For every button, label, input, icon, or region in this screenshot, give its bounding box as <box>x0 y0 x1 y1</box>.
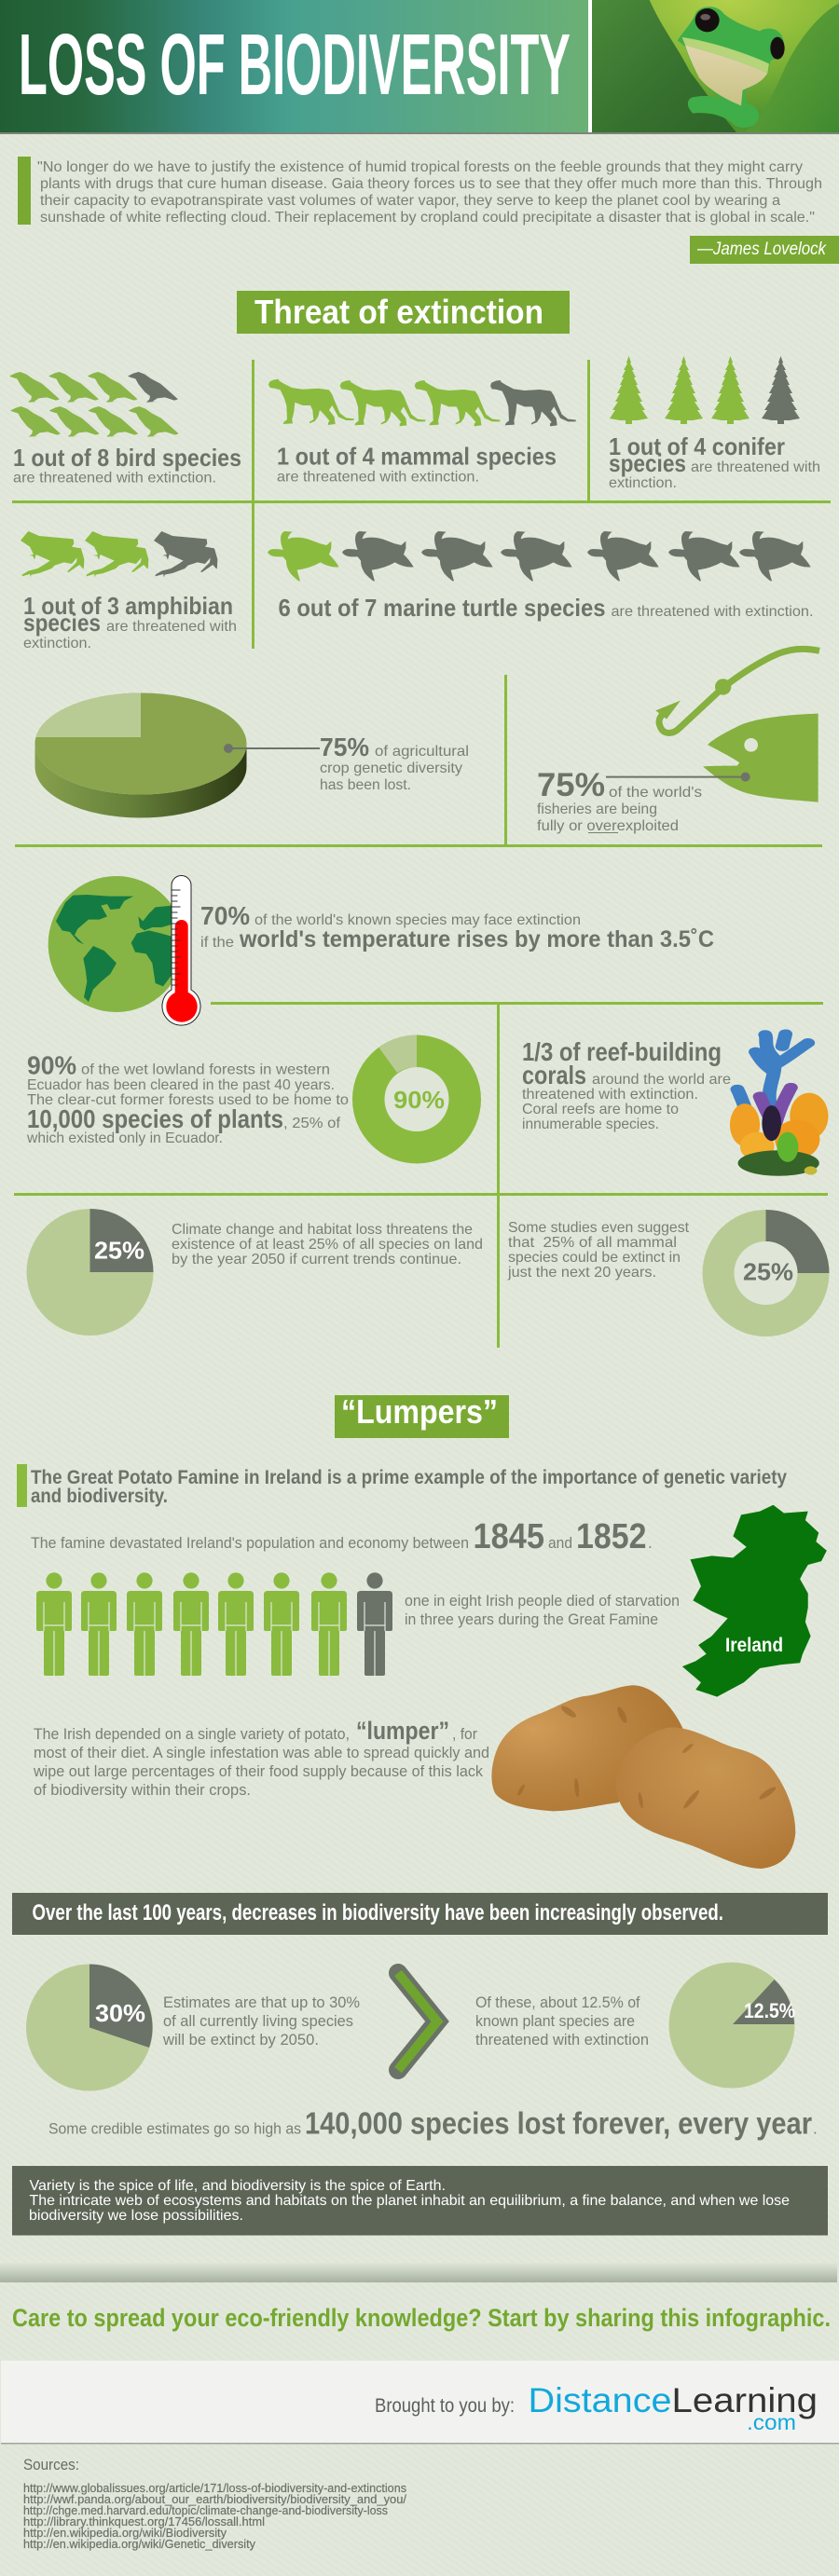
chart: donut 90%: 90% <box>393 1086 445 1114</box>
famine deaths text <box>405 1592 680 1628</box>
quote block <box>18 157 822 226</box>
amphibian statistic <box>23 592 237 651</box>
conifer statistic <box>609 432 820 491</box>
chart: pie 25%: 25% <box>94 1236 144 1264</box>
potato variety text: most of their diet. A single infestation was able to spread quickly and <box>34 1744 489 1761</box>
coral statistic: Coral reefs are home to <box>522 1102 679 1117</box>
quote block: "No longer do we have to justify the existence of humid tropical forests on the feeble grounds that they might carry <box>37 159 803 175</box>
intro: potato famine: and biodiversity. <box>31 1486 168 1507</box>
forest statistic: of the wet lowland forests in western <box>81 1062 330 1077</box>
fisheries statistic: fisheries are being <box>537 802 657 817</box>
turtle statistic <box>278 594 813 622</box>
fisheries statistic <box>537 767 702 834</box>
callout: variety: Variety is the spice of life, and biodiversity is the spice of Earth. <box>30 2178 446 2194</box>
fisheries statistic: of the world's <box>609 785 702 801</box>
temperature statistic: 70% <box>200 901 250 930</box>
icon: coral <box>730 1034 829 1176</box>
coral statistic: around the world are <box>592 1072 731 1088</box>
sources: http://www.globalissues.org/article/171/loss-of-biodiversity-and-extinctions <box>23 2481 406 2495</box>
famine dates: 1852 <box>576 1517 647 1556</box>
panel: birds <box>9 372 241 486</box>
heading: threat of extinction: Threat of extinction <box>254 293 543 331</box>
banner: last 100 years <box>12 1893 828 1935</box>
temperature statistic: world's temperature rises by more than 3.5˚C <box>239 926 714 952</box>
quote block: plants with drugs that cure human disease. Gaia theory forces us to see that they offer much more than this. Through <box>40 176 822 192</box>
coral statistic: threatened with extinction. <box>522 1087 698 1103</box>
panel: amphibians <box>21 531 237 651</box>
potato variety text: , for <box>452 1725 477 1743</box>
famine dates: and <box>548 1534 572 1552</box>
statistic: 140,000 species: Some credible estimates go so high as <box>48 2119 301 2138</box>
chart: pie 30% <box>26 1965 153 2091</box>
chart: pie 30%: 30% <box>95 1999 145 2027</box>
forest statistic: , 25% of <box>283 1116 341 1131</box>
quote block: their capacity to evapotranspirate vast volumes of water vapor, they serve to keep the planet cool by wearing a <box>40 193 780 209</box>
sources: http://en.wikipedia.org/wiki/Genetic_diversity <box>23 2537 255 2551</box>
icon: thermometer <box>162 876 200 1025</box>
panel: habitat loss <box>26 1209 483 1336</box>
panel: mammal extinction <box>507 1210 830 1336</box>
icon: frog silhouettes <box>21 531 217 577</box>
quote attribution: —James Lovelock <box>696 240 827 259</box>
famine deaths text: one in eight Irish people died of starvation <box>405 1592 680 1610</box>
mammal extinction text <box>507 1220 690 1281</box>
fisheries statistic: 75% <box>537 767 605 803</box>
panel: corals <box>522 1034 829 1176</box>
forest statistic: The clear-cut former forests used to be home to <box>27 1092 349 1108</box>
forest statistic: 10,000 species of plants <box>27 1104 283 1133</box>
temperature statistic <box>200 901 714 952</box>
logo: DistanceLearning.com: Learning <box>671 2381 818 2419</box>
conifer statistic: extinction. <box>609 475 677 491</box>
estimate text: of all currently living species <box>163 2012 353 2030</box>
panel: temperature <box>48 876 714 1025</box>
callout: variety: The intricate web of ecosystems and habitats on the planet inhabit an equilibrium, a fine balance, and when we lose <box>30 2193 790 2209</box>
famine dates <box>31 1517 653 1556</box>
sources: http://wwf.panda.org/about_our_earth/biodiversity/biodiversity_and_you/ <box>23 2492 406 2506</box>
amphibian statistic: species <box>23 609 101 637</box>
header banner <box>0 0 839 134</box>
turtle statistic: 6 out of 7 marine turtle species <box>278 594 606 622</box>
crop statistic: of agricultural <box>375 744 469 760</box>
conifer statistic: are threatened with <box>691 459 820 475</box>
icon: cheetah silhouettes <box>268 379 576 426</box>
coral statistic <box>522 1037 731 1132</box>
icon: frog photo <box>592 0 839 132</box>
crop statistic <box>320 733 469 793</box>
sources: http://en.wikipedia.org/wiki/Biodiversity <box>23 2526 227 2540</box>
fisheries statistic: fully or overexploited <box>537 818 679 834</box>
mammal statistic: 1 out of 4 mammal species <box>277 442 557 470</box>
amphibian statistic: are threatened with <box>106 619 237 635</box>
amphibian statistic: extinction. <box>23 636 91 651</box>
chart: 3D pie 75% <box>35 692 320 818</box>
panel: fisheries <box>537 649 819 834</box>
bird statistic <box>13 444 241 486</box>
plant species text: Of these, about 12.5% of <box>475 1994 640 2011</box>
habitat text <box>172 1222 483 1267</box>
famine dates: The famine devastated Ireland's population and economy between <box>31 1534 469 1552</box>
estimate text: will be extinct by 2050. <box>162 2031 319 2048</box>
chart: pie 12.5% <box>669 1963 795 2088</box>
quote attribution <box>690 236 839 264</box>
chart: donut 25% <box>703 1210 830 1336</box>
footer: brought to you by: Brought to you by: <box>375 2395 515 2417</box>
mammal statistic: are threatened with extinction. <box>277 470 479 485</box>
plant species text <box>475 1994 649 2048</box>
temperature statistic: if the <box>200 935 234 951</box>
panel: marine turtles <box>268 531 813 622</box>
crop statistic: 75% <box>320 733 369 761</box>
logo: DistanceLearning.com: .com <box>747 2410 796 2434</box>
estimate text <box>162 1994 360 2048</box>
chart: pie 12.5%: 12.5% <box>744 1999 795 2022</box>
sources: http://chge.med.harvard.edu/topic/climate-change-and-biodiversity-loss <box>23 2503 388 2517</box>
arrow: chevron <box>398 1973 437 2070</box>
famine dates: . <box>648 1534 653 1552</box>
callout: variety <box>12 2166 828 2235</box>
intro: potato famine <box>17 1464 787 1507</box>
potato variety text: wipe out large percentages of their food supply because of this lack <box>33 1762 483 1780</box>
famine dates: 1845 <box>474 1517 544 1556</box>
potato variety text: The Irish depended on a single variety of potato, <box>34 1725 350 1743</box>
sources <box>23 2456 406 2551</box>
forest statistic: which existed only in Ecuador. <box>26 1130 223 1146</box>
icon: bird silhouettes <box>9 372 179 437</box>
sources: http://library.thinkquest.org/17456/lossall.html <box>23 2514 265 2528</box>
statistic: 140,000 species <box>48 2106 818 2140</box>
icon: conifer trees <box>610 356 800 424</box>
mammal statistic <box>277 442 557 485</box>
bird statistic: are threatened with extinction. <box>13 470 216 486</box>
habitat text: Climate change and habitat loss threatens the <box>172 1222 473 1238</box>
turtle statistic: are threatened with extinction. <box>612 604 813 620</box>
icon: fish and hook <box>606 649 819 802</box>
crop statistic: crop genetic diversity <box>320 760 462 776</box>
chart: pie 25% <box>26 1209 153 1336</box>
panel: mammals <box>268 379 576 485</box>
callout: variety: biodiversity we lose possibilities. <box>29 2208 243 2224</box>
sources: Sources: <box>23 2456 79 2473</box>
forest statistic <box>26 1051 349 1146</box>
footer: brought to you by <box>1 2361 839 2444</box>
icon: potatoes <box>491 1685 795 1869</box>
coral statistic: 1/3 of reef-building <box>522 1037 722 1066</box>
habitat text: by the year 2050 if current trends continue. <box>172 1252 461 1267</box>
estimate text: Estimates are that up to 30% <box>163 1994 360 2011</box>
panel: crop diversity <box>35 692 469 818</box>
coral statistic: innumerable species. <box>522 1117 659 1132</box>
bird statistic: 1 out of 8 bird species <box>13 444 241 472</box>
icon: map of Ireland: Ireland <box>725 1635 783 1656</box>
habitat text: existence of at least 25% of all species on land <box>172 1237 483 1253</box>
panel: Ecuador forests <box>26 1035 481 1163</box>
potato variety text: of biodiversity within their crops. <box>34 1781 251 1799</box>
panel: conifers <box>609 356 820 491</box>
logo: DistanceLearning.com <box>528 2381 818 2434</box>
forest statistic: Ecuador has been cleared in the past 40 years. <box>27 1077 335 1093</box>
statistic: 140,000 species: . <box>813 2119 818 2138</box>
plant species text: threatened with extinction <box>475 2031 649 2048</box>
icon: turtle silhouettes <box>268 531 811 581</box>
heading: lumpers: “Lumpers” <box>341 1392 498 1431</box>
conifer statistic: species <box>609 449 686 477</box>
mammal extinction text: that 25% of all mammal <box>508 1235 677 1251</box>
chart: donut 25%: 25% <box>743 1258 793 1286</box>
potato variety text <box>33 1717 489 1799</box>
mammal extinction text: species could be extinct in <box>508 1250 681 1266</box>
mammal extinction text: Some studies even suggest <box>508 1220 690 1236</box>
icon: row of people <box>36 1572 392 1676</box>
icon: globe <box>48 876 185 1012</box>
icon: map of Ireland <box>682 1505 827 1697</box>
chart: donut 90% <box>352 1035 481 1163</box>
mammal extinction text: just the next 20 years. <box>507 1265 656 1281</box>
plant species text: known plant species are <box>475 2012 635 2030</box>
amphibian statistic: 1 out of 3 amphibian <box>23 592 233 620</box>
potato variety text: “lumper” <box>356 1717 449 1745</box>
temperature statistic: of the world's known species may face extinction <box>254 912 581 928</box>
famine deaths text: in three years during the Great Famine <box>405 1610 658 1628</box>
crop statistic: has been lost. <box>320 777 411 793</box>
conifer statistic: 1 out of 4 conifer <box>609 432 785 460</box>
logo: DistanceLearning.com: Distance <box>528 2381 671 2419</box>
forest statistic: 90% <box>27 1051 76 1079</box>
quote block: sunshade of white reflecting cloud. Their replacement by cropland could precipitate a disaster that is global in scale." <box>40 210 815 226</box>
coral statistic: corals <box>522 1061 586 1089</box>
